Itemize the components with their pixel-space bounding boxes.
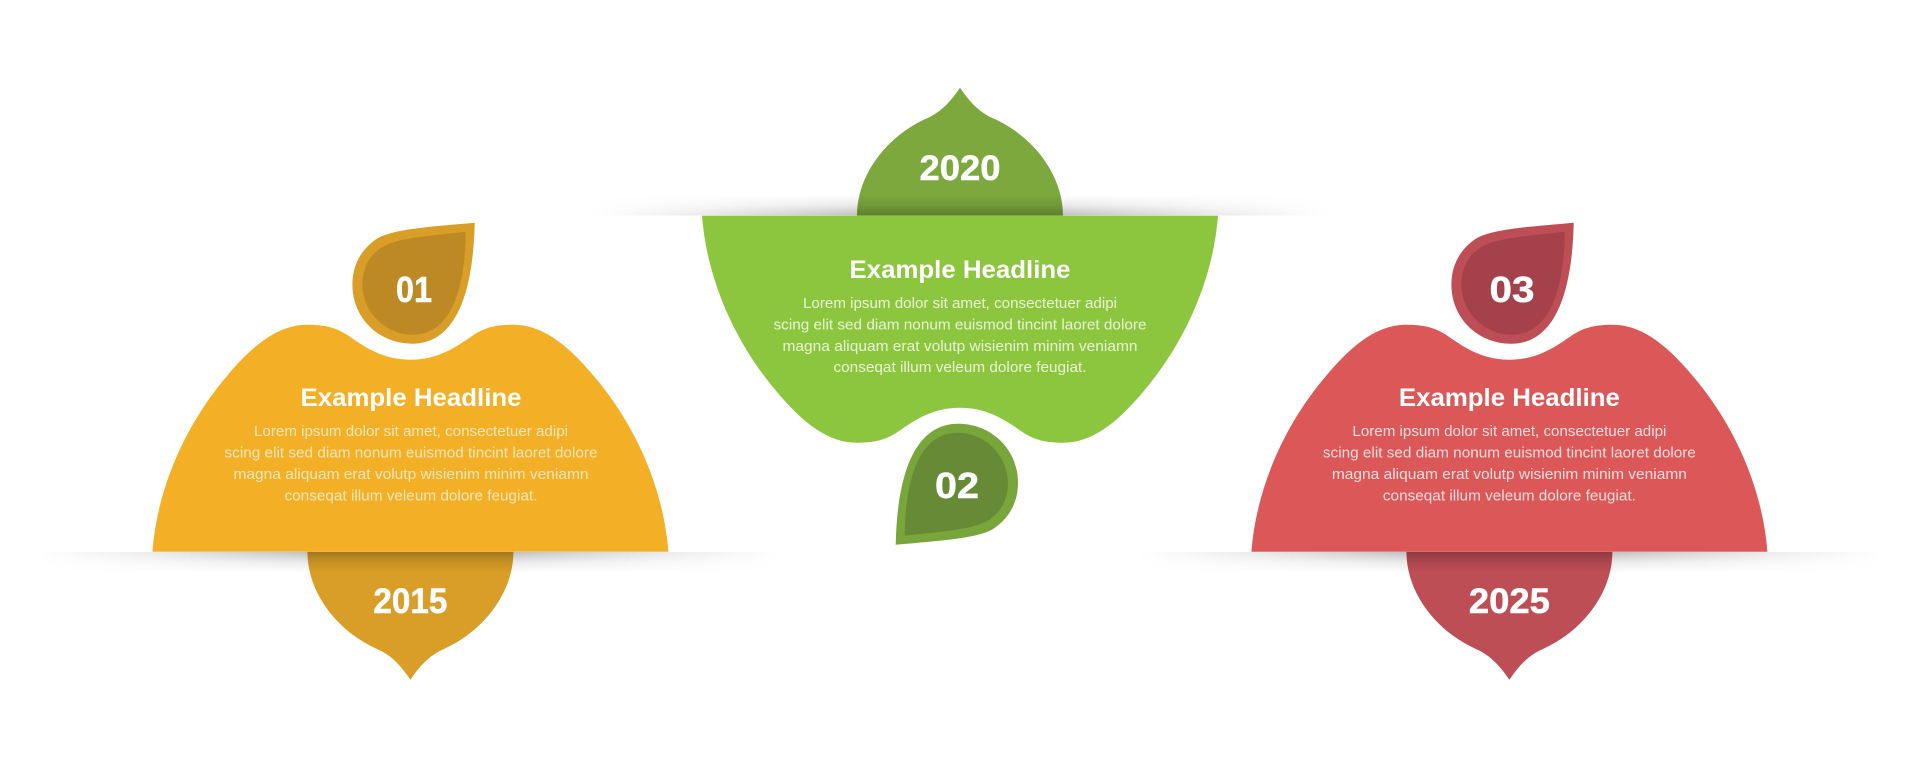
shadow under yellow panel <box>86 552 734 568</box>
year tab: 2020 <box>857 88 1063 216</box>
body text: scing elit sed diam nonum euismod tincint laoret dolore <box>774 316 1146 334</box>
body text: scing elit sed diam nonum euismod tincint laoret dolore <box>1323 444 1696 462</box>
body text: scing elit sed diam nonum euismod tincint laoret dolore <box>224 444 598 462</box>
body text: Lorem ipsum dolor sit amet, consectetuer adipi <box>254 423 568 440</box>
panel: 01 / 2015 (yellow) <box>86 222 734 680</box>
shadow above green panel <box>636 199 1284 216</box>
body text: Lorem ipsum dolor sit amet, consectetuer adipi <box>803 295 1117 312</box>
number: 02: 02 <box>935 465 979 506</box>
body text: conseqat illum veleum dolore feugiat. <box>1383 488 1636 504</box>
body text: conseqat illum veleum dolore feugiat. <box>284 488 538 504</box>
year tab: 2025 <box>1406 552 1612 680</box>
yellow main shape <box>152 325 668 552</box>
panel: 03 / 2025 (red) <box>1186 222 1833 680</box>
shadow under red panel <box>1186 552 1833 568</box>
number: 01: 01 <box>396 269 432 310</box>
drop badge: 01 <box>352 223 475 344</box>
drop badge: 02 <box>896 424 1018 545</box>
headline: Example Headline <box>300 384 522 412</box>
year label: 2025: 2025 <box>1469 582 1550 621</box>
body text: Lorem ipsum dolor sit amet, consectetuer adipi <box>1352 423 1666 440</box>
green main shape <box>702 216 1218 443</box>
headline: Example Headline <box>850 256 1071 284</box>
year label: 2020: 2020 <box>920 149 1000 188</box>
body text <box>1323 423 1696 504</box>
year tab: 2015 <box>307 552 513 680</box>
body text: magna aliquam erat volutp wisienim minim veniamn <box>234 466 588 483</box>
red main shape <box>1251 325 1767 552</box>
body text: magna aliquam erat volutp wisienim minim veniamn <box>782 338 1138 355</box>
panel: 02 / 2020 (green) <box>636 88 1284 545</box>
headline: Example Headline <box>1399 384 1620 412</box>
drop badge: 03 <box>1451 223 1574 344</box>
body text: conseqat illum veleum dolore feugiat. <box>834 359 1086 376</box>
body text <box>224 423 598 504</box>
body text: magna aliquam erat volutp wisienim minim veniamn <box>1332 466 1687 483</box>
body text <box>774 295 1146 376</box>
year label: 2015: 2015 <box>373 582 447 621</box>
number: 03: 03 <box>1490 269 1534 310</box>
